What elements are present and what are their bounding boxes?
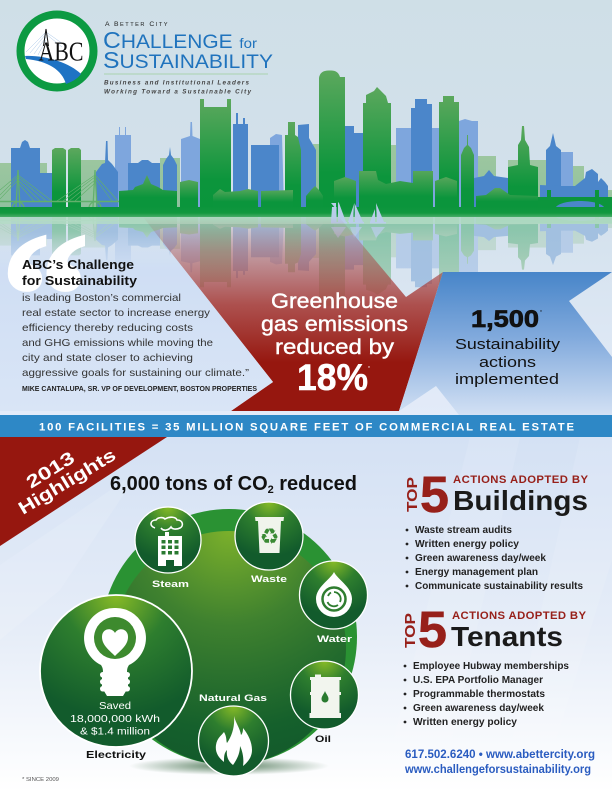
quote body: aggressive goals for sustaining our climate.”: [22, 368, 250, 379]
stat: sustainability actions: Sustainability: [455, 336, 561, 353]
label: Oil: Oil: [315, 734, 331, 745]
top 5 buildings heading: TOP: [404, 477, 421, 512]
buildings list: Energy management plan: [415, 567, 538, 578]
top 5 tenants heading: Tenants: [451, 621, 563, 652]
label: Steam: Steam: [152, 579, 189, 590]
buildings list: Green awareness day/week: [415, 553, 546, 564]
tenants list: Employee Hubway memberships: [413, 661, 569, 672]
icon: cloud: [151, 517, 182, 530]
stat: sustainability actions: 1,500: [471, 306, 539, 333]
stat: greenhouse gas: 18%: [297, 357, 368, 398]
icon: building: [158, 532, 182, 566]
2013 highlights corner banner: 2013: [23, 447, 78, 492]
ground shadow: [129, 757, 329, 775]
top 5 buildings heading: ACTIONS ADOPTED BY: [453, 474, 588, 486]
label: Electricity: Electricity: [86, 750, 147, 761]
quote body: [22, 293, 250, 379]
electricity savings text: & $1.4 million: [80, 726, 150, 738]
green waterfront: [0, 207, 612, 217]
stat: greenhouse gas: Greenhouse: [271, 290, 398, 313]
logo: Challenge for: CHALLENGE for: [103, 27, 257, 53]
electricity savings text: Saved: [99, 700, 131, 712]
top 5 tenants heading: 5: [418, 601, 447, 658]
electricity savings text: 18,000,000 kWh: [70, 713, 160, 725]
label: Waste: Waste: [251, 574, 287, 585]
disc: water: [300, 561, 368, 629]
stat: sustainability actions: [455, 306, 561, 388]
logo: ABC badge: [20, 14, 94, 88]
facilities band: [0, 415, 612, 437]
tenants list: Programmable thermostats: [413, 689, 545, 700]
footnote: * SINCE 2009: [22, 777, 59, 783]
quote body: city and state closer to achieving: [22, 353, 193, 364]
big green circle: [101, 509, 357, 765]
sailboats: [331, 202, 386, 238]
disc: electricity: [40, 595, 192, 747]
label: Water: Water: [317, 634, 352, 645]
stat: sustainability actions: *: [540, 310, 542, 316]
stat: greenhouse gas: gas emissions: [261, 313, 408, 336]
buildings list: Communicate sustainability results: [415, 581, 583, 592]
quote heading: [22, 257, 138, 288]
background: sky: [0, 0, 612, 415]
stat: greenhouse gas: reduced by: [275, 336, 395, 359]
top 5 tenants heading: [402, 601, 586, 658]
top 5 buildings heading: Buildings: [453, 485, 588, 516]
quote body: efficiency thereby reducing costs: [22, 323, 193, 334]
logo: small heading: A B ETTER CITY: [105, 22, 169, 28]
icon: recycling bin: ♻: [260, 525, 279, 550]
tenants list: Written energy policy: [413, 717, 517, 728]
blue arrow panel: [399, 272, 612, 415]
opening quote mark: “: [1, 198, 89, 393]
top 5 tenants heading: ACTIONS ADOPTED BY: [452, 610, 586, 622]
quote panel background: [0, 217, 273, 411]
icon: water drop with arrows: [316, 572, 352, 617]
contact details: www.challengeforsustainability.org: [404, 762, 591, 776]
stat: sustainability actions: implemented: [455, 371, 559, 388]
icon: flame: [216, 716, 252, 766]
buildings list: Written energy policy: [415, 539, 519, 550]
quote body: real estate sector to increase energy: [22, 308, 211, 319]
heading: CO2 reduced: reduced: [274, 473, 357, 495]
electricity savings text: [70, 700, 160, 738]
logo: tagline: [104, 80, 251, 96]
top 5 buildings heading: 5: [420, 466, 449, 523]
red arrow panel: [143, 217, 443, 411]
shoreline reflection strip: [0, 217, 612, 224]
facilities band: 100 FACILITIES = 35 MILLION SQUARE FEET OF COMMERCIAL REAL ESTATE: [39, 422, 574, 434]
buildings list: Waste stream audits: [415, 525, 512, 536]
quote body: is leading Boston’s commercial: [22, 293, 181, 304]
quote text: [22, 257, 257, 393]
top 5 buildings heading: [404, 466, 588, 523]
disc: oil: [290, 661, 358, 729]
icon: oil barrel: [310, 674, 341, 718]
stat: greenhouse gas: *: [368, 366, 370, 372]
logo: tagline: Working Toward a Sustainable City: [104, 88, 251, 96]
stat: sustainability actions: actions: [479, 354, 536, 371]
2013 highlights corner banner: Highlights: [15, 445, 119, 518]
logo: ABC badge: ABC: [38, 36, 84, 66]
logo: tagline: Business and Institutional Leaders: [104, 80, 249, 86]
stat: greenhouse gas: [261, 290, 408, 398]
icon: light bulb with heart: [84, 608, 146, 696]
quote body: and GHG emissions while moving the: [22, 338, 213, 349]
2013 highlights corner banner: [0, 437, 167, 546]
disc: waste: [235, 502, 303, 570]
water reflection of skyline: [0, 217, 612, 306]
quote heading: for Sustainability: [22, 273, 138, 288]
disc: natural gas: [198, 706, 268, 776]
quote heading: ABC’s Challenge: [22, 257, 134, 272]
label: Natural Gas: Natural Gas: [199, 693, 267, 704]
contact details: [404, 747, 595, 776]
logo: Sustainability: SUSTAINABILITY: [103, 47, 273, 73]
contact details: 617.502.6240 • www.abettercity.org: [405, 747, 595, 761]
disc: steam: [135, 507, 201, 573]
heading: CO2 reduced: 2: [268, 484, 274, 496]
tenants list: Green awareness day/week: [413, 703, 544, 714]
tenants list: [404, 661, 569, 728]
buildings list: [406, 525, 583, 592]
skyline illustration: [0, 70, 612, 207]
quote attribution: MIKE CANTALUPA, SR. VP OF DEVELOPMENT, BOSTON PROPERTIES: [22, 386, 257, 393]
top 5 tenants heading: TOP: [402, 613, 419, 648]
background: lower page: [0, 437, 612, 792]
heading: CO2 reduced: 6,000 tons of CO: [110, 473, 268, 495]
tenants list: U.S. EPA Portfolio Manager: [413, 675, 543, 686]
